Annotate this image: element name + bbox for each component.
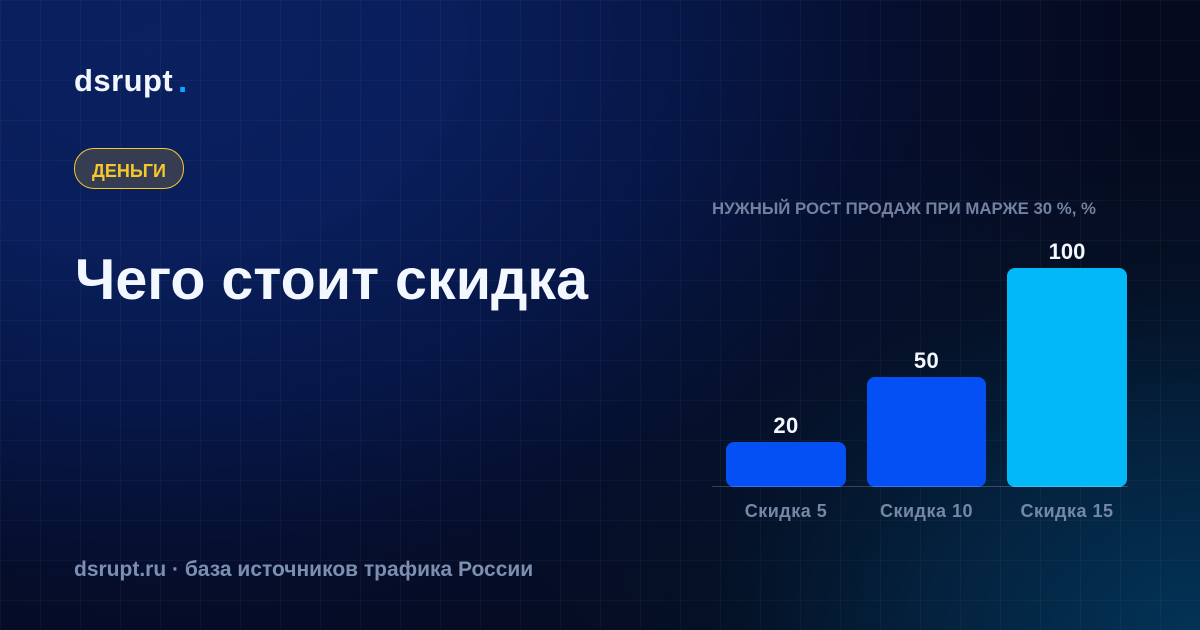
chart title: НУЖНЫЙ РОСТ ПРОДАЖ ПРИ МАРЖЕ 30 %, % bbox=[712, 199, 1096, 218]
category badge: ДЕНЬГИ bbox=[92, 161, 166, 181]
logo: . bbox=[178, 62, 188, 99]
bar: Скидка 5 bbox=[726, 442, 846, 487]
title: Чего стоит скидка bbox=[75, 248, 588, 312]
label Скидка 15: Скидка 15 bbox=[1020, 501, 1114, 521]
label Скидка 5: Скидка 5 bbox=[745, 501, 827, 521]
category badge bbox=[74, 148, 184, 189]
value 50: 50 bbox=[914, 348, 939, 373]
footer text: dsrupt.ru · база источников трафика России bbox=[74, 558, 533, 581]
label Скидка 10: Скидка 10 bbox=[880, 501, 973, 521]
baseline bbox=[712, 486, 1128, 487]
bar chart bbox=[712, 198, 1128, 521]
bar: Скидка 15 bbox=[1007, 268, 1127, 487]
logo: dsrupt bbox=[74, 63, 173, 98]
value 100: 100 bbox=[1049, 239, 1085, 264]
value 20: 20 bbox=[773, 413, 799, 438]
bar: Скидка 10 bbox=[867, 377, 986, 487]
